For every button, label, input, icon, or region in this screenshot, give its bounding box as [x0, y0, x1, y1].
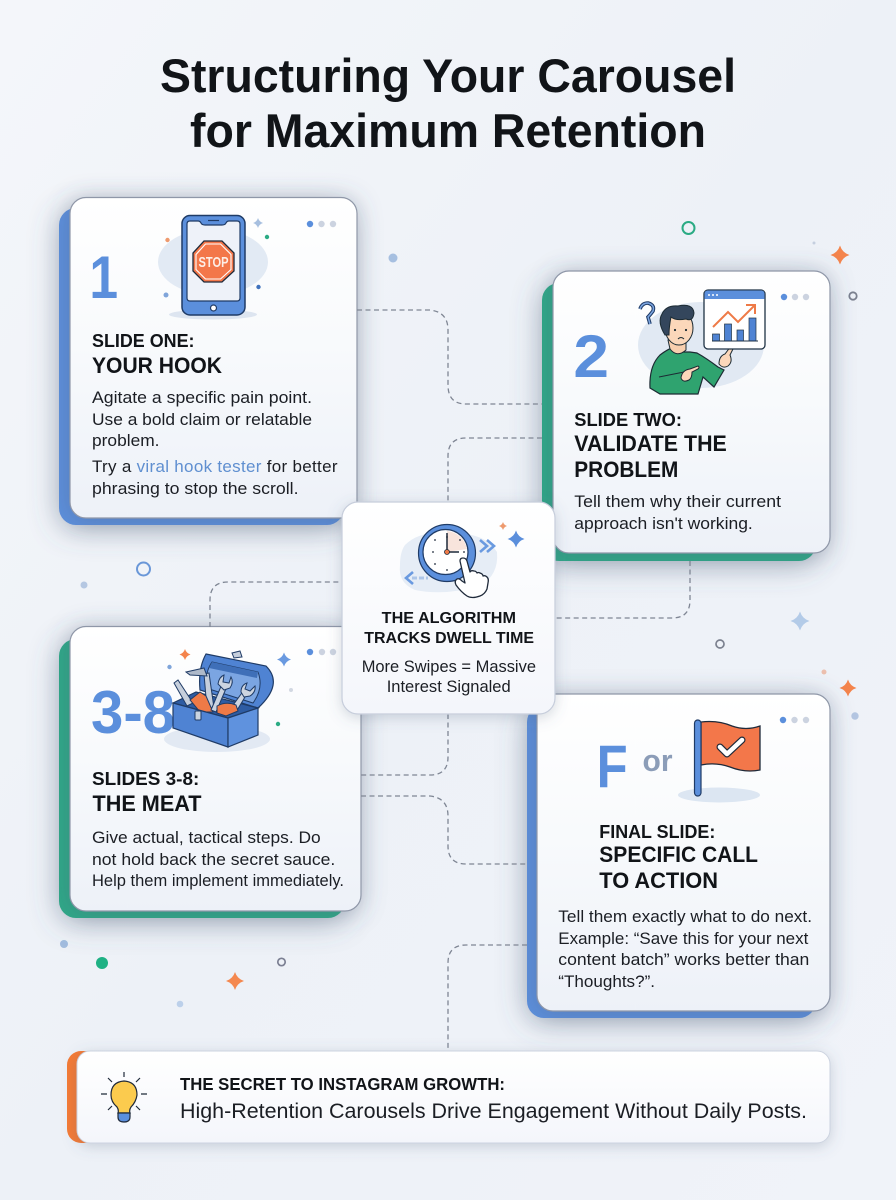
heading: THE ALGORITHM: [382, 610, 516, 627]
title: [160, 49, 736, 157]
progress dots: [781, 294, 809, 300]
body text: Tell them why their current: [574, 492, 781, 511]
card face: [70, 198, 357, 518]
panel: slide one: [59, 198, 357, 525]
body text: Give actual, tactical steps. Do: [92, 828, 321, 847]
panel: slide two: [542, 271, 830, 561]
body text: “Thoughts?”.: [558, 972, 655, 991]
icon: clock with swipe hand: [400, 522, 524, 598]
icon: light bulb: [101, 1072, 147, 1122]
heading: [364, 610, 534, 647]
panel: bottom takeaway: [67, 1051, 830, 1143]
card face: [537, 694, 830, 1011]
card backing: [59, 639, 345, 918]
body text: Agitate a specific pain point.: [92, 388, 312, 407]
body text: approach isn't working.: [574, 514, 753, 533]
number 1: 1: [89, 244, 118, 311]
icon: phone with stop sign: [158, 216, 269, 320]
card backing: [527, 705, 816, 1018]
progress dots: [780, 717, 809, 723]
icon: toolbox: [164, 649, 293, 752]
card backing: [59, 208, 344, 525]
word or: or: [642, 743, 672, 778]
heading: VALIDATE THE: [574, 431, 727, 456]
card face: [77, 1051, 830, 1143]
body text: [574, 492, 781, 533]
connector lines: [210, 310, 690, 1050]
body text: High-Retention Carousels Drive Engagement Without Daily Posts.: [180, 1100, 807, 1123]
number 2: 2: [573, 323, 609, 390]
title: for Maximum Retention: [190, 104, 706, 157]
panel: final slide: [527, 694, 830, 1018]
heading: SLIDE ONE:: [92, 331, 194, 351]
heading: [599, 822, 758, 893]
heading: SPECIFIC CALL: [599, 842, 758, 867]
card face: [342, 502, 555, 714]
body text: not hold back the secret sauce.: [92, 850, 335, 869]
heading: [92, 331, 222, 378]
body text: phrasing to stop the scroll.: [92, 479, 298, 498]
body text: [92, 388, 338, 498]
icon: confused person with chart: [638, 290, 765, 394]
panel: algorithm callout: [342, 502, 555, 714]
body text: Help them implement immediately.: [92, 871, 344, 890]
number 3-8: 3-8: [91, 679, 175, 746]
heading: SLIDES 3-8:: [92, 769, 199, 789]
card face: [70, 626, 361, 911]
orange backing: [67, 1051, 127, 1143]
body text: More Swipes = Massive: [362, 657, 536, 676]
body text: Tell them exactly what to do next.: [558, 907, 812, 926]
heading: TO ACTION: [599, 868, 718, 893]
heading: [574, 410, 727, 482]
heading: [92, 769, 202, 816]
card backing: [542, 283, 816, 561]
body text: [558, 907, 812, 991]
card face: [553, 271, 830, 553]
body text: content batch” works better than: [558, 950, 809, 969]
panel: slides 3-8: [59, 626, 361, 918]
icon: phone with stop sign: STOP: [198, 254, 228, 271]
body text: [362, 657, 536, 696]
body text: problem.: [92, 431, 160, 450]
heading: THE MEAT: [92, 791, 202, 816]
icon: flag with check: [678, 720, 760, 802]
heading: YOUR HOOK: [92, 353, 222, 378]
body text: Example: “Save this for your next: [558, 929, 809, 948]
progress dots: [307, 649, 336, 655]
heading: SLIDE TWO:: [574, 410, 682, 430]
heading: THE SECRET TO INSTAGRAM GROWTH:: [180, 1074, 505, 1094]
progress dots: [307, 221, 336, 227]
background decorations: [60, 222, 859, 1007]
title: Structuring Your Carousel: [160, 49, 736, 102]
body text: Interest Signaled: [387, 677, 511, 696]
body text: Try a viral hook tester for better: [92, 457, 338, 476]
heading: TRACKS DWELL TIME: [364, 630, 534, 647]
heading: FINAL SLIDE:: [599, 822, 715, 842]
letter F: F: [597, 733, 628, 800]
body text: Use a bold claim or relatable: [92, 410, 312, 429]
body text: [92, 828, 344, 890]
heading: PROBLEM: [574, 457, 678, 482]
